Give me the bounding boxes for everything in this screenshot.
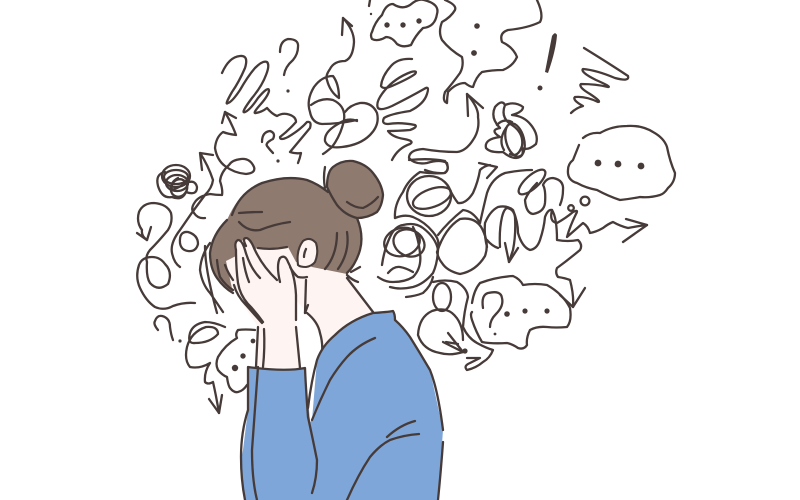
arrow to blob (409, 94, 478, 173)
bun fold and strands (324, 167, 378, 208)
right arrow squiggle (551, 210, 647, 237)
right arrow head (623, 219, 647, 242)
bulb top loop (433, 283, 451, 311)
loops (311, 99, 378, 154)
arrow head top (342, 18, 352, 35)
arrow small up (172, 153, 213, 267)
question mark lower left (154, 316, 173, 340)
sweater outline (308, 311, 443, 500)
dot (286, 89, 290, 93)
hair strand behind (200, 243, 223, 313)
dot (276, 159, 280, 163)
arrow head (222, 112, 236, 123)
cloud dots (232, 339, 255, 371)
hand (235, 238, 300, 368)
zigzag right (571, 48, 628, 113)
question mark small (262, 131, 274, 153)
cloud dots (384, 18, 422, 28)
coil (377, 59, 428, 160)
sleeve outline (241, 367, 317, 500)
arrow head (479, 163, 497, 178)
speech cloud right (568, 126, 675, 200)
blob dots (471, 23, 480, 56)
lower cloud dots (504, 308, 550, 317)
ear detail and neck lines (304, 249, 373, 353)
upper arc (438, 210, 480, 235)
left scribbles (137, 112, 255, 413)
arrow head (467, 94, 483, 116)
arrow with loops (309, 18, 357, 124)
right scribbles (378, 126, 675, 370)
scribble loops upper (390, 159, 490, 288)
sleeve fill (241, 367, 320, 500)
arrow up squiggle (192, 112, 254, 218)
wave top continued (525, 178, 563, 214)
question mark in cloud (483, 292, 502, 327)
scribble ball left (157, 165, 197, 200)
inner down arrow (487, 208, 515, 262)
wave lower (485, 206, 581, 307)
big left arrow squiggle (137, 203, 195, 309)
tilted loop (515, 166, 549, 198)
scribble loops lower (378, 224, 438, 297)
top centre scribbles (369, 0, 628, 173)
lower thought cloud (471, 276, 571, 349)
face and neck (226, 246, 373, 353)
cloud behind hand (216, 330, 255, 392)
person (200, 161, 443, 500)
big blob outline (440, 0, 541, 103)
scribble ball right (486, 102, 537, 159)
down arrow head (505, 243, 518, 262)
exclamation mark (545, 33, 557, 73)
left arrow head (137, 227, 151, 240)
speech dots (595, 160, 644, 169)
down arrow squiggle (186, 322, 225, 413)
sweater body (245, 312, 443, 500)
zigzag coil (222, 56, 311, 163)
trailing curve (433, 280, 493, 370)
small circles (568, 197, 589, 211)
question mark top (280, 39, 298, 75)
hair (210, 178, 361, 293)
ear (298, 239, 317, 267)
bulb circle (418, 309, 463, 354)
spark arrow (443, 333, 463, 352)
hair outline (210, 178, 361, 293)
right lower arrow head (560, 288, 585, 307)
wrist lines (256, 327, 300, 368)
small loop (180, 232, 198, 251)
down arrow head (209, 395, 222, 413)
small question mark top (369, 0, 370, 6)
thought cloud top (371, 0, 437, 46)
hair strands (217, 212, 348, 290)
hair bun (327, 161, 383, 218)
dot (370, 13, 372, 15)
question dot (494, 333, 496, 335)
wave top (480, 170, 532, 223)
dot (178, 339, 182, 343)
big oval (437, 219, 487, 274)
exclamation dot (538, 86, 542, 90)
hand outline (234, 238, 306, 323)
top left scribbles (222, 18, 378, 163)
sweater folds (312, 338, 419, 500)
spark star (462, 348, 468, 354)
